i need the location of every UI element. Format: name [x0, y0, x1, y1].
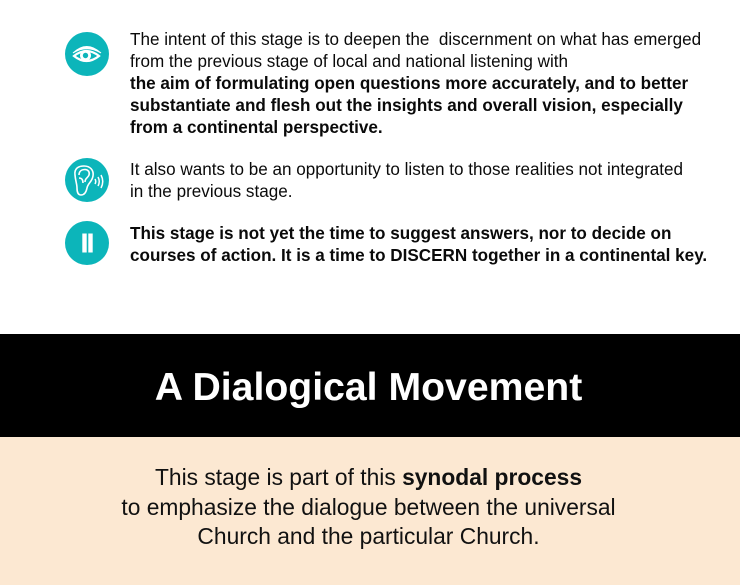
text block: time to discern: courses of action. It is a time to DISCERN together in a continental key.	[130, 246, 707, 265]
text block: intent of this stage: The intent of this stage is to deepen the discernment on what has emerged	[130, 30, 701, 49]
text block: intent of this stage: from the previous stage of local and national listening with	[130, 52, 568, 71]
panel: synodal process text	[0, 437, 740, 585]
text block: listening opportunity	[130, 160, 683, 201]
banner: A Dialogical Movement	[0, 334, 740, 437]
text block: listening opportunity: It also wants to be an opportunity to listen to those realities not integrated	[130, 160, 683, 179]
text block: listening opportunity: in the previous stage.	[130, 182, 292, 201]
text block: intent of this stage: substantiate and flesh out the insights and overall vision, especially	[130, 96, 683, 115]
icon: ear	[65, 158, 109, 202]
text block: intent of this stage	[130, 30, 701, 137]
panel: synodal process text: to emphasize the dialogue between the universal	[121, 494, 616, 520]
text block: time to discern: This stage is not yet the time to suggest answers, nor to decide on	[130, 224, 671, 243]
panel: synodal process text: This stage is part of this synodal process	[155, 464, 582, 490]
banner: A Dialogical Movement: A Dialogical Movement	[155, 366, 582, 409]
panel: synodal process text: Church and the particular Church.	[197, 523, 540, 549]
icon: pause	[65, 221, 109, 265]
text block: intent of this stage: the aim of formulating open questions more accurately, and to better	[130, 74, 688, 93]
text block: intent of this stage: from a continental perspective.	[130, 118, 383, 137]
icon: eye	[65, 32, 109, 76]
text block: time to discern	[130, 224, 707, 265]
